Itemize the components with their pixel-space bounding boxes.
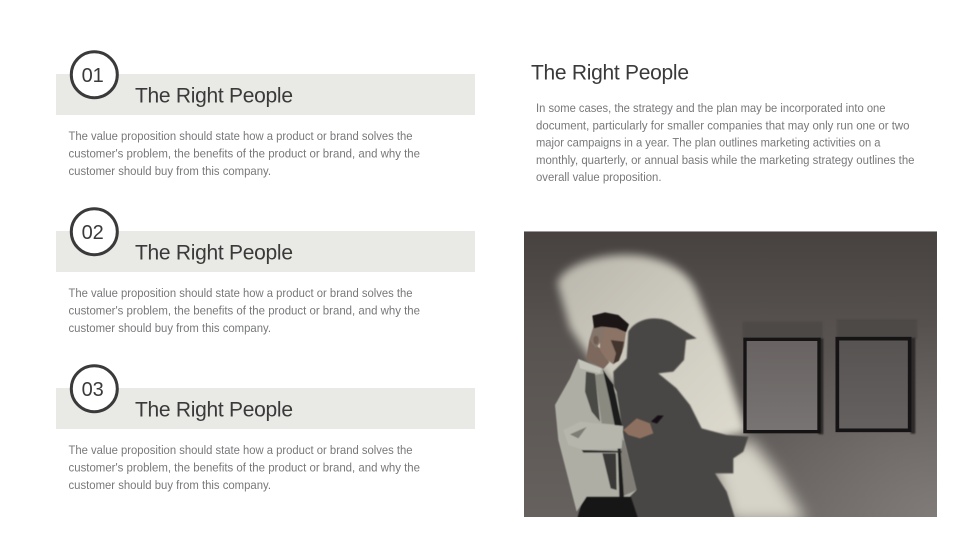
frame left bbox=[745, 339, 819, 432]
man: hand bbox=[623, 418, 653, 438]
man: shaved side and ear bbox=[589, 326, 604, 348]
text block: item 01: The value proposition should state how a product or brand solves the bbox=[68, 129, 413, 143]
man: face bbox=[600, 327, 626, 364]
text block: item 02: customer should buy from this company. bbox=[68, 321, 271, 335]
panel: item 01 bbox=[56, 52, 475, 178]
heading: item 03: The Right People bbox=[135, 398, 293, 422]
heading: right column: The Right People bbox=[531, 62, 689, 84]
text block: item 01: customer should buy from this company. bbox=[68, 164, 271, 178]
text block: item 02: The value proposition should state how a product or brand solves the bbox=[68, 286, 413, 300]
light patch on wall bbox=[557, 255, 747, 442]
heading: item 01: The Right People bbox=[135, 84, 293, 108]
man: shirt bbox=[555, 359, 637, 512]
icon: number circle 02: 02 bbox=[82, 222, 104, 244]
text block: item 03: customer's problem, the benefits of the product or brand, and why the bbox=[68, 460, 420, 474]
icon: number circle 03: 03 bbox=[82, 379, 104, 401]
text block: right column: overall value proposition. bbox=[536, 170, 662, 184]
text block: item 02: customer's problem, the benefits of the product or brand, and why the bbox=[68, 304, 420, 318]
icon: number circle 02 bbox=[71, 209, 117, 255]
text block: item 01: customer's problem, the benefits of the product or brand, and why the bbox=[68, 146, 420, 160]
man's shadow bbox=[613, 318, 748, 518]
text block: right column: In some cases, the strategy and the plan may be incorporated into one bbox=[536, 101, 886, 115]
man: neck bbox=[586, 340, 609, 369]
icon: number circle 03 bbox=[71, 366, 117, 412]
panel: item 02 bbox=[56, 209, 475, 335]
band: item 02 bbox=[56, 231, 475, 272]
panel: item 03 bbox=[56, 366, 475, 492]
icon: number circle 01 bbox=[71, 52, 117, 98]
man: hair bbox=[592, 312, 629, 332]
man bbox=[555, 312, 664, 518]
man: sleeve bbox=[614, 424, 624, 450]
text block: item 03: customer should buy from this company. bbox=[68, 478, 271, 492]
text block: item 03 bbox=[68, 443, 420, 492]
icon: number circle 01: 01 bbox=[82, 65, 104, 87]
frame shadows bbox=[743, 319, 917, 434]
text block: right column bbox=[536, 101, 915, 184]
frame right bbox=[837, 339, 910, 430]
man: trousers bbox=[577, 496, 638, 517]
man: phone bbox=[651, 415, 664, 424]
man: collar bbox=[578, 359, 602, 373]
text block: item 03: The value proposition should state how a product or brand solves the bbox=[68, 443, 413, 457]
text block: item 01 bbox=[68, 129, 420, 178]
text block: right column: major campaigns in a year. The plan outlines marketing activities on a bbox=[536, 136, 881, 150]
band: item 03 bbox=[56, 388, 475, 429]
photo: man with phone beside two frames bbox=[524, 231, 937, 522]
heading: item 02: The Right People bbox=[135, 242, 293, 264]
text block: right column: monthly, quarterly, or annual basis while the marketing strategy outlines the bbox=[536, 153, 915, 167]
band: item 01 bbox=[56, 74, 475, 115]
text block: right column: document, particularly for smaller companies that may only run one or two bbox=[536, 118, 910, 132]
text block: item 02 bbox=[68, 286, 420, 335]
